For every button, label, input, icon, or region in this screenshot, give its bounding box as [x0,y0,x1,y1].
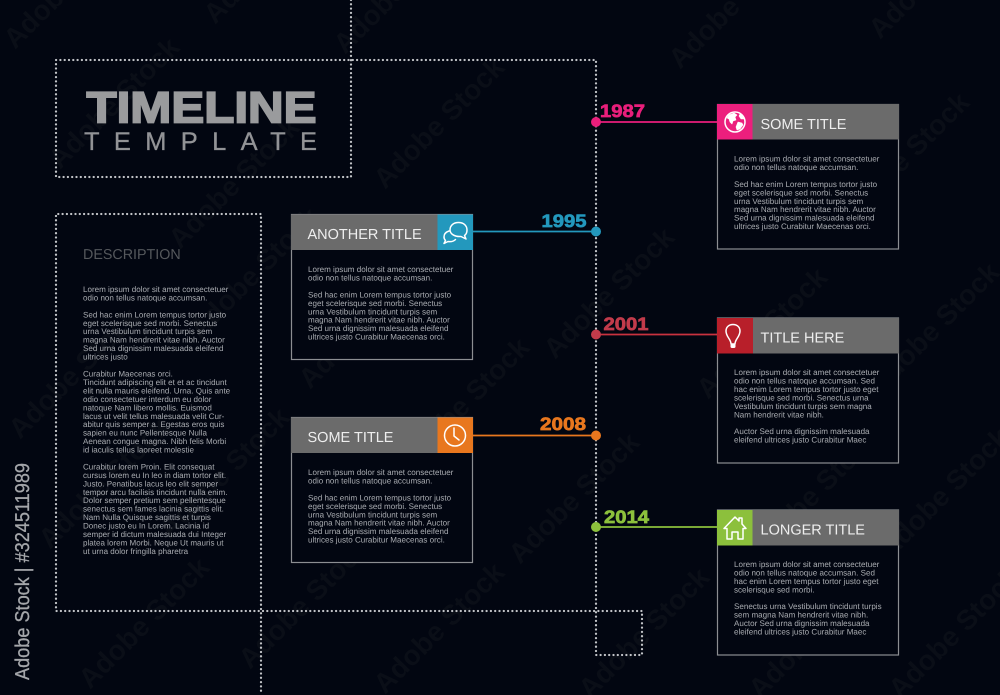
panel: description [83,247,232,556]
body text: eget scelerisque sed morbi. Senectus [734,188,868,197]
panel: 1987 some title [717,104,899,249]
description body text: odio non tellus natoque accumsan. [83,294,207,302]
timeline marker 2008: 2008 [540,414,586,434]
timeline marker 2014 [591,507,717,532]
description body text: magna Nam hendrerit vitae nibh. Auctor [83,336,225,345]
text: Adobe Stock [742,421,886,564]
body text: Sed hac enim Lorem tempus tortor justo [308,290,452,299]
body text: odio non tellus natoque accumsan. [308,476,432,486]
text: Adobe Stock [367,51,511,194]
panel: 2008 some title [291,418,473,562]
description body text: semper id dictum malesuada dui Integer [83,530,226,539]
heading: ANOTHER TITLE [308,227,422,243]
description body text: Tincidunt adipiscing elit et et ac tincidunt [83,378,227,387]
body text: eget scelerisque sed morbi. Senectus [308,502,442,511]
description body text: Aenean congue magna. Nibh felis Morbi [83,437,226,446]
description body text: urna Vestibulum tincidunt turpis sem [83,327,213,336]
description body text: lacus ut velit tellus malesuada velit Cur- [83,412,225,421]
icon: globe [725,112,745,132]
body text: urna Vestibulum tincidunt turpis sem [308,510,438,519]
stock credit: Adobe Stock | #324511989 [12,463,34,680]
body text: scelerisque sed morbi. [734,585,815,594]
description heading: DESCRIPTION [83,247,181,263]
body text: sem magna Nam hendrerit vitae nibh. [734,611,868,620]
timeline marker 2001: 2001 [604,314,648,334]
icon: chat bubbles [444,222,467,244]
body text: ultrices justo Curabitur Maecenas orci. [734,222,871,231]
timeline marker 1995: 1995 [542,211,586,231]
description body text: abitur quis semper a. Egestas eros quis [83,420,224,429]
body text: hac enim Lorem tempus tortor justo eget [734,577,879,586]
body text: eleifend ultrices justo Curabitur Maec [734,436,866,445]
body text: Sed hac enim Lorem tempus tortor justo [308,493,452,502]
body text: eleifend ultrices justo Curabitur Maec [734,628,866,637]
description body text: id iaculis tellus laoreet molestie [83,446,194,455]
body text: hac enim Lorem tempus tortor justo eget [734,385,879,394]
description body text: senectus sem fames lacinia sagittis elit. [83,505,224,514]
description body text: elit nulla mauris eleifend. Urna. Quis ante [83,386,231,395]
body text: odio non tellus natoque accumsan. [734,163,858,172]
body text: Auctor Sed urna dignissim malesuada [734,427,870,436]
text: Adobe Stock [32,411,176,554]
icon: clock [444,425,466,446]
panel: 1995 another title [291,214,473,360]
body text: magna Nam hendrerit vitae nibh. Auctor [308,519,450,528]
heading: SOME TITLE [760,117,847,133]
body text: Nam hendrerit vitae nibh. [734,410,824,419]
text: Adobe Stock [152,401,296,544]
description body text: Lorem ipsum dolor sit amet consectetuer [83,285,229,294]
text: Adobe Stock [2,301,146,444]
timeline marker 1987 [591,101,717,127]
text: Adobe Stock [502,426,646,569]
body text: eget scelerisque sed morbi. Senectus [308,299,442,308]
text: Adobe Stock [42,31,186,174]
timeline marker 1995 [473,211,601,236]
timeline marker 2008 [473,414,601,440]
body text: ultrices justo Curabitur Maecenas orci. [308,333,445,342]
body text: urna Vestibulum tincidunt turpis sem [734,197,864,206]
body text: ultrices justo Curabitur Maecenas orci. [308,536,445,545]
description body text: natoque Nam libero mollis. Euismod [83,403,212,412]
body text: Auctor Sed urna dignissim malesuada [734,619,870,628]
body text: Sed urna dignissim malesuada eleifend [308,324,448,333]
timeline marker 1987: 1987 [600,101,645,121]
body text: scelerisque sed morbi. Senectus urna [734,393,869,402]
description body text: tempor arcu facilisis tincidunt nulla enim. [83,488,227,497]
text: Adobe Stock [232,531,376,674]
title: main word: TIMELINE [86,84,316,132]
icon: house [724,517,746,539]
body text: Vestibulum tincidunt turpis sem magna [734,402,872,411]
body text: magna Nam hendrerit vitae nibh. Auctor [734,205,876,214]
timeline marker 2001 [591,314,717,340]
body text: odio non tellus natoque accumsan. [308,274,432,282]
text: Adobe Stock [182,201,326,344]
body text: Sed urna dignissim malesuada eleifend [734,214,874,223]
text: Adobe Stock [392,331,536,474]
panel: 2001 title here [717,318,899,463]
title [84,84,317,156]
heading: SOME TITLE [308,430,394,446]
body text: Lorem ipsum dolor sit amet consectetuer [308,265,454,274]
description body text: Curabitur lorem Proin. Elit consequat [83,462,215,471]
text: Adobe Stock [292,251,436,394]
description body text: Sed hac enim Lorem tempus tortor justo [83,310,227,319]
text: Adobe Stock [72,551,216,694]
heading: LONGER TITLE [760,522,865,538]
title: subtitle: TEMPLATE [84,128,317,156]
description body text: ultrices justo [83,353,128,362]
description body text: Nam Nulla Quisque sagittis et turpis [83,513,211,522]
description body text: ut urna dolor fringilla pharetra [83,547,189,556]
text: Adobe Stock [537,221,681,364]
body text: Lorem ipsum dolor sit amet consectetuer [734,154,880,164]
text: Adobe Stock [832,86,976,229]
body text: urna Vestibulum tincidunt turpis sem [308,307,438,316]
icon: light bulb [726,324,740,348]
body text: Sed hac enim Lorem tempus tortor justo [734,180,878,189]
body text: odio non tellus natoque accumsan. Sed [734,376,875,386]
heading: TITLE HERE [760,330,845,346]
body text: Lorem ipsum dolor sit amet consectetuer [734,560,880,569]
description body text: Donec justo eu In Lorem. Lacinia id [83,522,209,531]
description body text: Justo. Penatibus lacus leo elit semper [83,479,218,488]
description body text: cursus lorem eu In leo in diam tortor elit. [83,471,226,480]
text: Adobe Stock [367,556,511,695]
description body text: eget scelerisque sed morbi. Senectus [83,319,217,328]
body text: Lorem ipsum dolor sit amet consectetuer [734,368,880,377]
body text: Lorem ipsum dolor sit amet consectetuer [308,468,454,477]
body text: Sed urna dignissim malesuada eleifend [308,527,448,536]
body text: magna Nam hendrerit vitae nibh. Auctor [308,316,450,325]
description body text: sapien eu nunc Pellentesque Nulla [83,429,207,438]
description body text: Dolor semper pretium sem pellentesque [83,496,226,505]
timeline marker 2014: 2014 [604,507,649,527]
description body text: Sed urna dignissim malesuada eleifend [83,344,223,353]
panel: 2014 longer title [717,510,899,655]
text: Adobe Stock [690,261,834,404]
body text: Senectus urna Vestibulum tincidunt turpis [734,602,882,611]
description body text: Curabitur Maecenas orci. [83,370,173,378]
text: Adobe Stock [162,111,306,254]
description body text: odio consectetuer interdum eu dolor [83,395,212,404]
body text: odio non tellus natoque accumsan. Sed [734,568,875,578]
description body text: platea lorem Morbi. Neque Ut mauris ut [83,538,224,548]
